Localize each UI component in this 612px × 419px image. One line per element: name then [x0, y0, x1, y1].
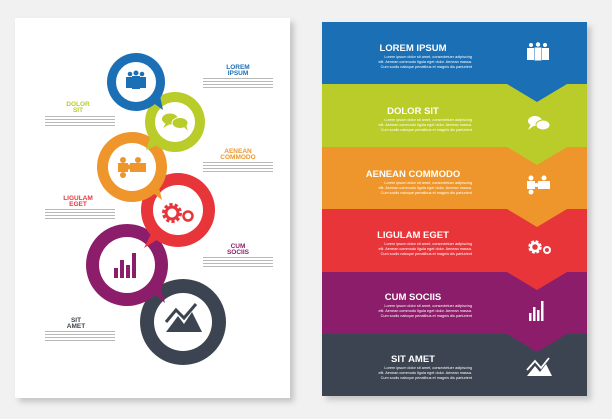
text block: lorem ipsum: LOREM: [226, 64, 250, 71]
band: lorem ipsum: Cum sociis natoque penatibus et magnis dis parturient: [381, 65, 473, 69]
band: sit amet: Lorem ipsum dolor sit amet, consectetuer adipiscing: [384, 366, 472, 370]
circle: orange: [97, 132, 167, 202]
text block: ligulam eget: EGET: [69, 201, 87, 208]
text block: cum sociis: SOCIIS: [227, 249, 250, 256]
text block: ligulam eget: [45, 195, 115, 219]
band: dolor sit: DOLOR SIT: [387, 106, 439, 117]
icon: puzzle: [527, 176, 550, 194]
band: lorem ipsum: LOREM IPSUM: [379, 43, 447, 54]
text block: ligulam eget: LIGULAM: [63, 195, 93, 202]
band: dolor sit: [322, 84, 587, 165]
text block: sit amet: [45, 317, 115, 341]
band: dolor sit: Cum sociis natoque penatibus et magnis dis parturient: [381, 128, 473, 132]
text block: lorem ipsum: IPSUM: [228, 70, 248, 77]
text block: aenean commodo: AENEAN: [224, 148, 252, 155]
band: dolor sit: Lorem ipsum dolor sit amet, consectetuer adipiscing: [384, 118, 472, 122]
band: cum sociis: Cum sociis natoque penatibus et magnis dis parturient: [381, 314, 473, 318]
band: dolor sit: elit. Aenean commodo ligula eget dolor. Aenean massa.: [378, 123, 472, 127]
icon: bar chart: [529, 301, 544, 321]
panel: right page: [322, 22, 591, 400]
band: lorem ipsum: Lorem ipsum dolor sit amet, consectetuer adipiscing: [384, 55, 472, 59]
band: aenean commodo: [322, 147, 587, 227]
text block: sit amet: SIT: [71, 317, 81, 324]
icon: puzzle: [118, 157, 146, 178]
band: lorem ipsum: elit. Aenean commodo ligula eget dolor. Aenean massa.: [378, 60, 472, 64]
icon: people: [527, 42, 549, 60]
band: sit amet: elit. Aenean commodo ligula eget dolor. Aenean massa.: [378, 371, 472, 375]
band: cum sociis: elit. Aenean commodo ligula eget dolor. Aenean massa.: [378, 309, 472, 313]
band: cum sociis: Lorem ipsum dolor sit amet, consectetuer adipiscing: [384, 304, 472, 308]
band: ligulam eget: Lorem ipsum dolor sit amet, consectetuer adipiscing: [384, 242, 472, 246]
text block: sit amet: AMET: [67, 323, 85, 330]
text block: aenean commodo: [203, 148, 273, 172]
circle: green: [145, 92, 205, 152]
text block: lorem ipsum: [203, 64, 273, 88]
circle: red: [141, 173, 215, 248]
band: ligulam eget: [322, 209, 587, 290]
band: ligulam eget: elit. Aenean commodo ligula eget dolor. Aenean massa.: [378, 247, 472, 251]
text block: aenean commodo: COMMODO: [220, 154, 256, 161]
icon: chart mountain: [166, 304, 202, 332]
icon: speech bubbles: [528, 116, 550, 130]
icon: gears: [530, 242, 550, 253]
panel: left page: [15, 18, 294, 402]
icon: speech bubbles: [162, 114, 188, 131]
band: sit amet: Cum sociis natoque penatibus et magnis dis parturient: [381, 376, 473, 380]
band: cum sociis: [322, 272, 587, 352]
text block: cum sociis: CUM: [231, 243, 245, 250]
band: cum sociis: CUM SOCIIS: [385, 292, 441, 303]
text block: cum sociis: [203, 243, 273, 267]
icon: bar chart: [114, 253, 136, 278]
icon: mountain chart: [527, 358, 552, 376]
text block: dolor sit: DOLOR: [66, 101, 90, 108]
band: aenean commodo: Lorem ipsum dolor sit amet, consectetuer adipiscing: [384, 181, 472, 185]
text block: dolor sit: [45, 101, 115, 126]
band: ligulam eget: Cum sociis natoque penatibus et magnis dis parturient: [381, 252, 473, 256]
band: aenean commodo: elit. Aenean commodo ligula eget dolor. Aenean massa.: [378, 186, 472, 190]
band: ligulam eget: LIGULAM EGET: [377, 230, 449, 241]
icon: gears: [164, 205, 192, 221]
band: aenean commodo: Cum sociis natoque penatibus et magnis dis parturient: [381, 191, 473, 195]
circle: purple: [86, 224, 168, 306]
band: lorem ipsum: [322, 22, 587, 102]
band: sit amet: SIT AMET: [391, 354, 435, 365]
band: aenean commodo: AENEAN COMMODO: [366, 169, 460, 180]
circle: blue: [107, 53, 165, 111]
band: sit amet: [322, 334, 587, 396]
text block: dolor sit: SIT: [73, 107, 83, 114]
circle: dark: [140, 279, 226, 365]
icon: people: [126, 70, 146, 89]
